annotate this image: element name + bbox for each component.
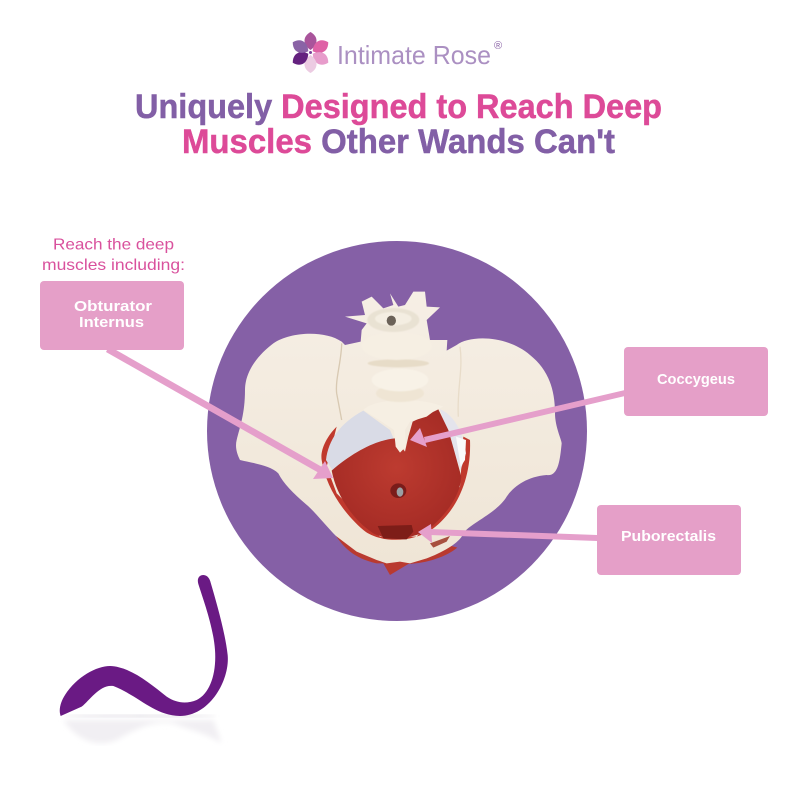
vertebrae [362, 308, 432, 402]
wand body [60, 575, 228, 716]
panel: coccygeus [624, 347, 768, 416]
muscle rim [321, 427, 470, 540]
pubic slot [430, 536, 450, 548]
icon: flower [290, 32, 331, 73]
bone shading [336, 343, 342, 420]
arrow: obturator internus [106, 346, 333, 479]
wand shadow [63, 715, 217, 717]
subheading line 1: Reach the deep [53, 236, 174, 254]
pelvic floor muscle [332, 409, 461, 538]
membrane left [326, 411, 394, 471]
muscle opening [390, 483, 406, 498]
label: coccygeus: Coccygeus [657, 371, 735, 388]
membrane right [440, 409, 466, 470]
label: obturator: Obturator [74, 298, 152, 315]
arrow: puborectalis [418, 524, 597, 543]
wand product [60, 575, 228, 743]
title line 1: Uniquely Designed to Reach Deep [135, 88, 662, 126]
title [135, 88, 662, 161]
registered mark: ® [494, 40, 502, 52]
panel: obturator internus [40, 281, 184, 350]
wand reflection [63, 720, 222, 743]
title line 2: Muscles Other Wands Can't [182, 123, 615, 161]
subheading line 2: muscles including: [42, 257, 185, 274]
arrow: coccygeus [410, 390, 625, 447]
bone [236, 292, 562, 563]
vertebra screw [387, 316, 396, 326]
label: puborectalis: Puborectalis [621, 528, 716, 545]
lower red muscle [336, 530, 457, 575]
logo wordmark: Intimate Rose [337, 40, 491, 70]
panel: puborectalis [597, 505, 741, 575]
subheading: reach the deep muscles [42, 236, 185, 274]
logo [290, 32, 502, 73]
sacrum [363, 400, 443, 453]
label: internus: Internus [79, 314, 144, 331]
panel: purple circle [207, 241, 587, 621]
pelvis model [236, 292, 562, 575]
